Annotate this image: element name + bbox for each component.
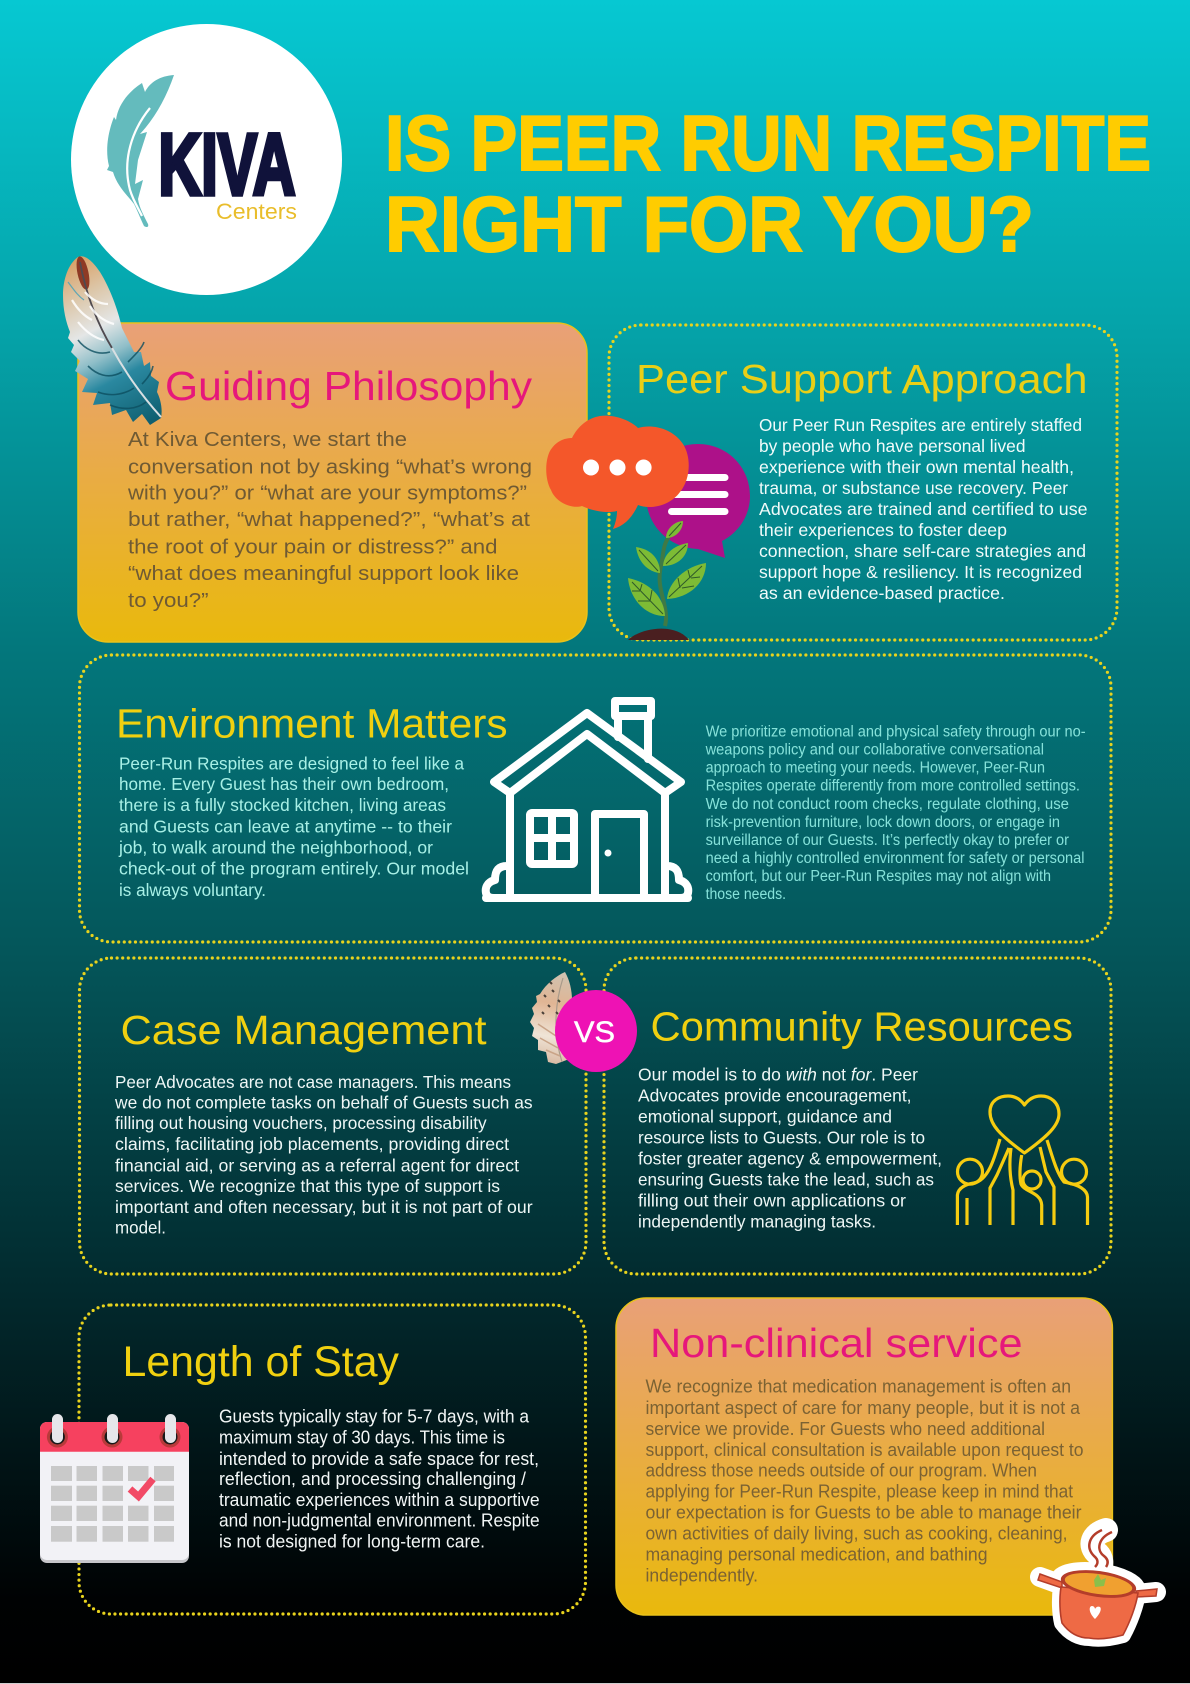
icon: logo feather: [107, 75, 174, 227]
text block: Length of Stay body: is not designed for long-term care.: [219, 1532, 485, 1552]
text block: Non-clinical body: applying for Peer-Run Respite, please keep in mind that: [646, 1481, 1073, 1501]
text block: Guiding Philosophy body: conversation not by asking “what’s wrong: [128, 456, 532, 478]
pot white sticker outline: [1040, 1530, 1156, 1639]
text block: Environment left body: there is a fully stocked kitchen, living areas: [119, 795, 446, 815]
text block: Environment right body: approach to meeting your needs. However, Peer-Run: [706, 760, 1045, 777]
text block: Length of Stay body: and non-judgmental environment. Respite: [219, 1511, 540, 1531]
heading: Peer Support Approach: Peer Support Approach: [636, 356, 1088, 402]
text block: Non-clinical body: managing personal medication, and bathing: [646, 1545, 988, 1565]
text block: Environment left body: check-out of the program entirely. Our model: [119, 859, 469, 879]
text block: Community Resources body: ensuring Guests take the lead, such as: [638, 1169, 934, 1189]
text block: Non-clinical body: support, clinical consultation is available upon request to: [646, 1440, 1084, 1460]
text block: Case Management body: we do not complete tasks on behalf of Guests such as: [114, 1092, 533, 1112]
text block: Non-clinical body: our expectation is for Guests to be able to manage their: [646, 1502, 1082, 1522]
text block: Non-clinical body: address those needs outside of our program. When: [646, 1461, 1037, 1481]
text block: Peer Support body: experience with their own mental health,: [759, 457, 1074, 477]
text block: Peer Support body: support hope & resiliency. It is recognized: [759, 562, 1082, 582]
title: RIGHT FOR YOU?: [385, 180, 1034, 268]
text block: Community Resources body: foster greater agency & empowerment,: [638, 1148, 942, 1168]
text block: Environment left body: job, to walk around the neighborhood, or: [118, 838, 433, 858]
panel: Case Management: [80, 958, 586, 1274]
panel: Non-clinical service: [616, 1298, 1112, 1615]
text block: Length of Stay body: Guests typically stay for 5-7 days, with a: [219, 1406, 530, 1426]
text block: Non-clinical body: We recognize that medication management is often an: [646, 1377, 1071, 1397]
text block: Guiding Philosophy body: At Kiva Centers, we start the: [128, 428, 407, 451]
text block: Case Management body: model.: [115, 1218, 166, 1238]
logo: Kiva Centers: [71, 24, 342, 295]
icon: people holding heart: [957, 1096, 1088, 1225]
icon: large feather: [63, 255, 162, 425]
text block: Case Management body: services. We recognize that this type of support is: [115, 1176, 500, 1196]
text block: Environment left body: home. Every Guest has their own bedroom,: [119, 774, 449, 794]
text block: Non-clinical body: important aspect of care for many people, but it is not a: [646, 1398, 1081, 1418]
text block: Non-clinical body: own activities of daily living, such as cooking, cleaning,: [646, 1523, 1068, 1543]
text block: Environment right body: those needs.: [706, 886, 786, 903]
text block: Community Resources body: Our model is to do with not for. Peer: [638, 1065, 918, 1085]
text block: Environment left body: and Guests can leave at anytime -- to their: [119, 816, 452, 836]
text block: Community Resources body: independently managing tasks.: [638, 1212, 876, 1232]
text block: Case Management body: claims, facilitating job placements, providing direct: [115, 1134, 509, 1154]
heading: Non-clinical service: Non-clinical service: [650, 1320, 1022, 1366]
text block: Environment right body: [705, 724, 1086, 903]
text block: Length of Stay body: maximum stay of 30 days. This time is: [219, 1427, 505, 1447]
text block: Length of Stay body: reflection, and processing challenging /: [219, 1469, 526, 1489]
text block: Case Management body: Peer Advocates are not case managers. This means: [115, 1072, 511, 1092]
icon: speech bubbles and plant: [546, 416, 750, 640]
orange speech bubble: [546, 416, 689, 529]
heading: Community Resources: Community Resources: [650, 1004, 1073, 1050]
heading: Guiding Philosophy: Guiding Philosophy: [165, 363, 533, 409]
purple speech bubble: [646, 444, 750, 558]
text block: Peer Support body: trauma, or substance use recovery. Peer: [759, 478, 1068, 498]
text block: Community Resources body: Advocates provide encouragement,: [638, 1086, 912, 1106]
text block: Environment right body: risk-prevention furniture, lock down doors, or engage in: [706, 814, 1060, 831]
text block: Peer Support body: Advocates are trained and certified to use: [759, 499, 1088, 519]
text block: Guiding Philosophy body: but rather, “what happened?”, “what’s at: [128, 508, 530, 531]
logo wordmark Centers: Centers: [216, 199, 297, 224]
text block: Environment right body: need a highly controlled environment for safety or personal: [706, 850, 1084, 867]
panel: Guiding Philosophy: [78, 323, 587, 642]
text block: Case Management body: financial aid, or serving as a referral agent for direct: [115, 1156, 519, 1176]
badge: VS: VS: [574, 1016, 615, 1049]
text block: Environment right body: We do not conduct room checks, regulate clothing, use: [706, 796, 1069, 813]
text block: Peer Support body: by people who have personal lived: [759, 436, 1026, 456]
text block: Environment left body: [118, 753, 469, 900]
text block: Peer Support body: Our Peer Run Respites are entirely staffed: [759, 415, 1082, 435]
text block: Environment right body: Respites operate differently from more controlled settings.: [706, 778, 1080, 795]
icon: cooking pot: [1038, 1530, 1157, 1639]
text block: Environment right body: surveillance of our Guests. It’s perfectly okay to prefer or: [706, 832, 1069, 849]
text block: Length of Stay body: intended to provide a safe space for rest,: [219, 1449, 539, 1469]
text block: Peer Support body: their experiences to foster deep: [759, 520, 1007, 540]
text block: Environment left body: Peer-Run Respites are designed to feel like a: [119, 753, 464, 773]
panel: Community Resources: [604, 958, 1111, 1274]
text block: Non-clinical body: service we provide. For Guests who need additional: [646, 1419, 1045, 1439]
icon: small feather: [530, 972, 572, 1064]
heading: Case Management: Case Management: [120, 1007, 487, 1053]
heading: Environment Matters: Environment Matters: [116, 700, 508, 746]
logo wordmark KIVA: KIVA: [158, 116, 296, 214]
text block: Case Management body: filling out housing vouchers, processing disability: [115, 1113, 487, 1133]
text block: Peer Support body: as an evidence-based practice.: [759, 583, 1005, 603]
text block: Peer Support body: connection, share self-care strategies and: [759, 541, 1086, 561]
icon: calendar: [40, 1414, 189, 1563]
text block: Guiding Philosophy body: to you?”: [128, 589, 209, 612]
text block: Community Resources body: resource lists to Guests. Our role is to: [638, 1127, 925, 1147]
panel: Environment Matters: [80, 655, 1111, 942]
text block: Environment right body: comfort, but our Peer-Run Respites may not align with: [706, 868, 1051, 885]
text block: Non-clinical body: [646, 1377, 1084, 1586]
text block: Environment left body: is always voluntary.: [119, 880, 266, 900]
text block: Length of Stay body: [219, 1406, 540, 1552]
panel: Length of Stay: [79, 1305, 586, 1614]
text block: Guiding Philosophy body: “what does meaningful support look like: [128, 562, 519, 585]
title: [385, 99, 1151, 268]
text block: Community Resources body: filling out their own applications or: [638, 1191, 906, 1211]
text block: Community Resources body: emotional support, guidance and: [638, 1107, 892, 1127]
text block: Peer Support body: [759, 415, 1088, 603]
text block: Case Management body: [114, 1072, 533, 1238]
text block: Non-clinical body: independently.: [646, 1566, 758, 1586]
text block: Length of Stay body: traumatic experiences within a supportive: [219, 1490, 540, 1510]
text block: Case Management body: important and often necessary, but it is not part of our: [115, 1197, 533, 1217]
text block: Guiding Philosophy body: the root of your pain or distress?” and: [128, 536, 498, 558]
panel: Peer Support Approach: [609, 325, 1117, 640]
heading: Length of Stay: Length of Stay: [122, 1338, 399, 1386]
plant: [628, 521, 706, 640]
text block: Environment right body: We prioritize emotional and physical safety through our no-: [706, 724, 1086, 740]
text block: Community Resources body: [638, 1065, 942, 1232]
text block: Environment right body: weapons policy and our collaborative conversational: [705, 742, 1044, 758]
text block: Guiding Philosophy body: [127, 428, 532, 612]
badge: VS: [555, 990, 637, 1072]
icon: house: [486, 701, 688, 898]
text block: Guiding Philosophy body: with you?” or “what are your symptoms?”: [127, 482, 527, 505]
